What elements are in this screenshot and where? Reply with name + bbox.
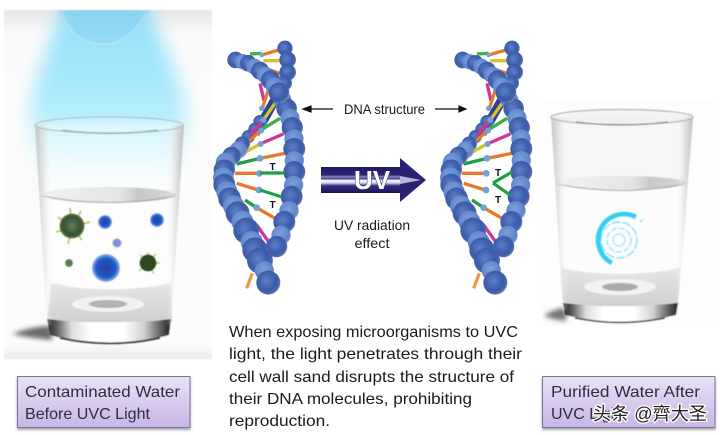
germ: large green bbox=[56, 208, 90, 244]
arrow: pointing left to DNA bbox=[303, 106, 333, 112]
DNA rungs with T-T bases: before UV bbox=[260, 173, 285, 197]
germ: small green bbox=[65, 259, 73, 267]
label: DNA structure: DNA structure bbox=[344, 101, 425, 117]
panel: contaminated water glass under UV light bbox=[4, 0, 212, 359]
callout: purified water: UVC Light bbox=[551, 406, 624, 423]
text block: explanation: When exposing microorganisms to UVC bbox=[229, 324, 518, 341]
icon: cyan purification target bbox=[598, 214, 643, 263]
panel: purified water glass bbox=[542, 100, 720, 327]
germ: blue right bbox=[150, 213, 164, 227]
germ: blue bbox=[98, 215, 112, 229]
text block: explanation: reproduction. bbox=[229, 413, 330, 430]
callout: purified water bbox=[542, 376, 715, 428]
UV arrow label: UV bbox=[354, 165, 391, 195]
glass body bbox=[551, 110, 693, 322]
DNA helix: after UV bbox=[440, 41, 532, 295]
callout: contaminated water bbox=[18, 376, 190, 428]
germ: dark green bbox=[139, 252, 160, 274]
DNA helix: before UV bbox=[213, 41, 305, 295]
watermark: 头条 @齊大圣 bbox=[593, 404, 707, 424]
panel backdrop bbox=[4, 10, 212, 359]
text block: explanation: light, the light penetrates through their bbox=[229, 346, 523, 363]
text block: explanation bbox=[229, 324, 523, 430]
germ: large blue bbox=[92, 254, 120, 282]
T label upper: before UV: T bbox=[269, 162, 276, 173]
DNA bent T-T dimer: after UV bbox=[493, 172, 512, 195]
panel backdrop bbox=[542, 100, 720, 327]
germ: small periwinkle bbox=[112, 238, 122, 248]
T label upper: after UV: T bbox=[495, 168, 501, 179]
glass body bbox=[35, 117, 184, 344]
label: UV radiation effect bbox=[334, 217, 410, 251]
UV light beam bbox=[31, 0, 186, 197]
callout: contaminated water: Contaminated Water bbox=[25, 384, 181, 401]
shadow under glass bbox=[544, 308, 566, 321]
arrow: UV bbox=[321, 158, 426, 202]
arrow: pointing right to DNA bbox=[435, 106, 466, 112]
T label lower: before UV: T bbox=[269, 200, 276, 211]
callout: purified water: Purified Water After bbox=[551, 384, 701, 401]
shadow under glass bbox=[12, 326, 52, 340]
text block: explanation: cell wall sand disrupts the structure of bbox=[229, 369, 515, 386]
callout: contaminated water: Before UVC Light bbox=[25, 406, 151, 423]
text block: explanation: their DNA molecules, prohibiting bbox=[229, 391, 472, 408]
label: UV radiation effect: effect bbox=[354, 235, 390, 251]
T label lower: after UV: T bbox=[495, 195, 501, 206]
label: UV radiation effect: UV radiation bbox=[334, 217, 410, 233]
